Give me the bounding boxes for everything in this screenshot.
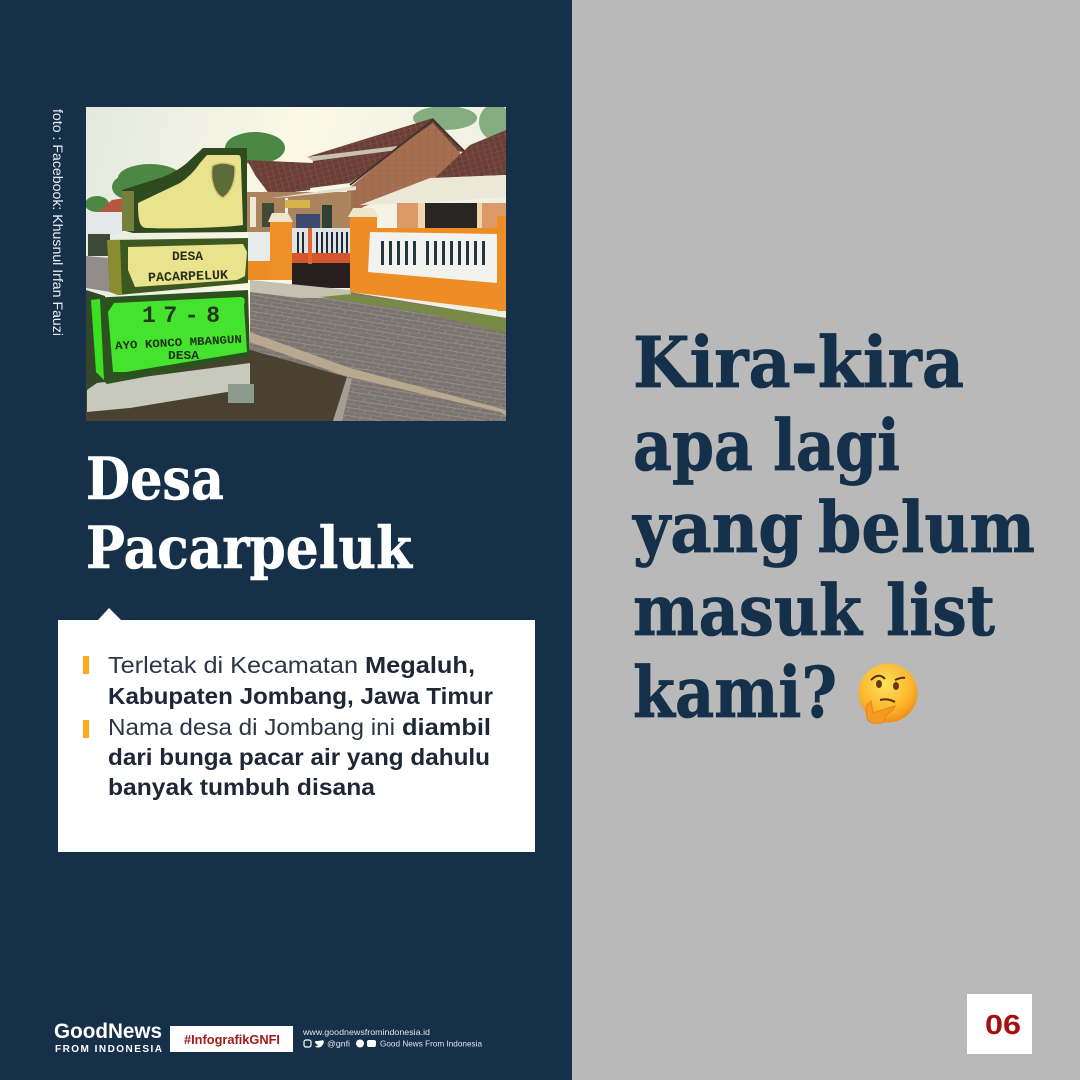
sign middle (107, 238, 248, 295)
logo: GoodNews From Indonesia: FROM INDONESIA (55, 1044, 162, 1055)
right house wall (397, 203, 506, 230)
icon: youtube (367, 1040, 376, 1047)
emblem (211, 163, 235, 198)
photo: village sign and houses: DESA (172, 249, 203, 264)
title: Desa Pacarpeluk: Desa (86, 445, 224, 513)
main roof (307, 118, 465, 157)
logo: GoodNews From Indonesia (54, 1020, 162, 1055)
heading: closing question: masuk (633, 569, 863, 652)
left small house (98, 198, 122, 212)
photo: village sign and houses: AYO KONCO MBANGUN (115, 334, 242, 353)
photo: village sign and houses (85, 104, 511, 421)
sign base (87, 363, 250, 412)
photo: village sign and houses: PACARPELUK (148, 268, 228, 285)
bullet 1 marker (83, 656, 89, 674)
panel: white info card with pointer (58, 608, 535, 852)
bullet 2 text: banyak tumbuh disana (108, 774, 376, 800)
panel: right grey background (572, 0, 1080, 1080)
back roof (247, 160, 313, 195)
pavement (142, 280, 506, 421)
photo: village sign and houses: 17-8 (142, 303, 220, 329)
heading: closing question: lagi (773, 404, 900, 487)
bullet 2 text: diambil (402, 714, 491, 740)
white awning (360, 175, 506, 205)
hashtag badge: #InfografikGNFI (184, 1033, 280, 1047)
bullet 1 text: Terletak di Kecamatan (108, 652, 358, 678)
panel: left navy background (0, 0, 572, 1080)
photo credit: foto : Facebook: Khusnul Irfan Fauzi (50, 109, 65, 336)
title: Desa Pacarpeluk (86, 445, 414, 582)
window (425, 203, 477, 228)
icon: instagram (304, 1040, 311, 1047)
trees (85, 104, 511, 212)
right roof (435, 130, 506, 178)
page name text: Good News From Indonesia (380, 1038, 482, 1048)
bullet 1 text (108, 652, 493, 709)
icon: facebook (356, 1040, 364, 1048)
bullet 2 text: Nama desa di Jombang ini (108, 714, 395, 740)
brick wall (347, 123, 460, 212)
sign top (122, 148, 247, 233)
bullet 2 text (108, 714, 491, 800)
logo: GoodNews From Indonesia: GoodNews (54, 1020, 162, 1043)
icon: thinking face emoji (858, 664, 918, 723)
left fence (248, 232, 270, 262)
bullet 1 text: Kabupaten Jombang, Jawa Timur (108, 683, 493, 709)
heading: closing question: yang (632, 486, 803, 569)
handle text: @gnfi (327, 1038, 350, 1048)
dark ground left of sign (86, 290, 105, 395)
title: Desa Pacarpeluk: Pacarpeluk (86, 514, 414, 582)
road left (86, 256, 110, 292)
page number box: 06 (985, 1009, 1021, 1040)
heading: closing question: kami? (633, 651, 837, 734)
sign bottom green (90, 290, 250, 384)
contact and social links (302, 1027, 482, 1048)
bullet 1 text: Megaluh, (365, 652, 475, 678)
bullet 2 marker (83, 720, 89, 738)
heading: closing question: apa (633, 404, 753, 487)
bullet 2 text: dari bunga pacar air yang dahulu (108, 744, 490, 770)
contact and social links: www.goodnewsfromindonesia.id (302, 1027, 430, 1037)
gate (292, 228, 350, 253)
porch (247, 192, 351, 232)
hashtag badge (170, 1026, 293, 1052)
heading: closing question: belum (818, 486, 1035, 569)
photo: village sign and houses: DESA (168, 349, 200, 363)
heading: closing question: list (886, 569, 995, 652)
icon: twitter (314, 1040, 324, 1048)
heading: closing question: Kira-kira (633, 321, 964, 404)
right fence (350, 217, 506, 311)
page number box (967, 994, 1032, 1054)
heading: closing question (632, 321, 1035, 734)
dirt (86, 350, 347, 421)
